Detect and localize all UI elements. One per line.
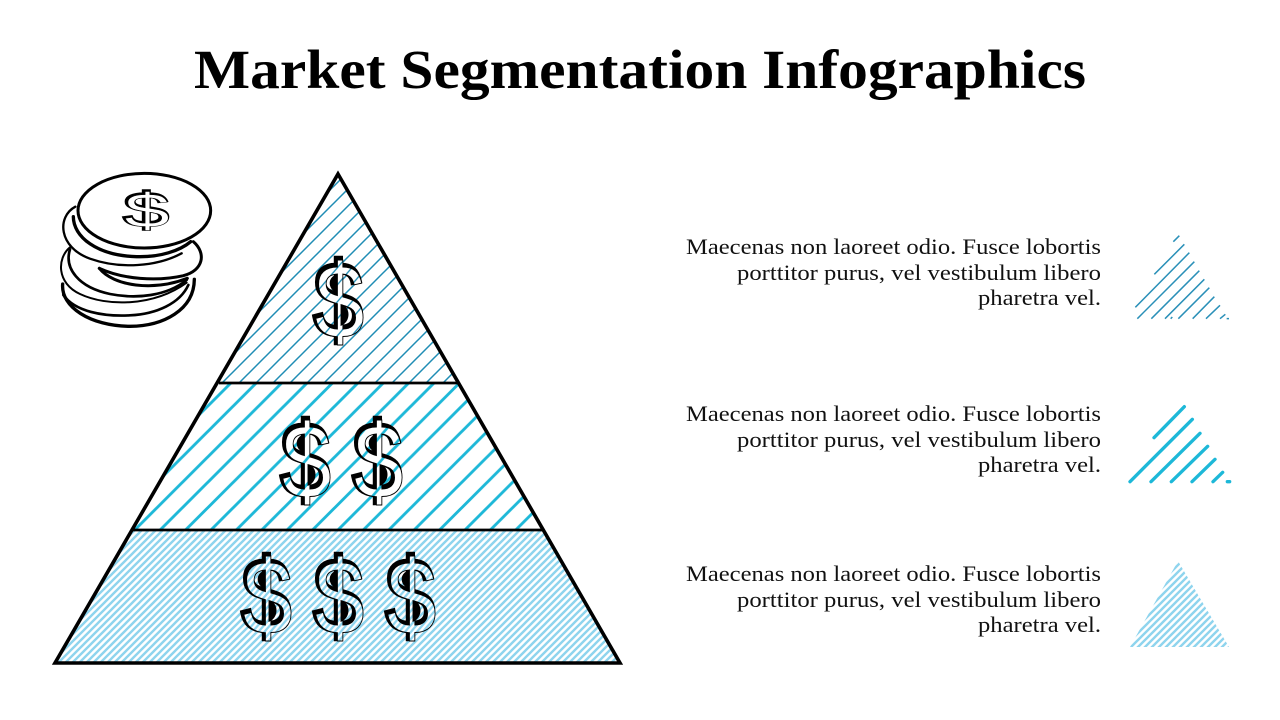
icon: legend triangle dark blue [1135, 236, 1229, 319]
icon: coin stack [61, 173, 211, 326]
tier: bottom hatch [55, 530, 620, 663]
icon: dollars middle tier: $ [354, 403, 404, 521]
text block 2: pharetra vel. [978, 452, 1101, 477]
text block 2 [686, 401, 1101, 477]
icon: dollars bottom tier: $ [241, 537, 291, 655]
icon: legend triangle light blue [1130, 562, 1229, 647]
text block 3 [686, 561, 1101, 637]
icon: dollars bottom tier: $ [313, 537, 363, 655]
text block 2: Maecenas non laoreet odio. Fusce lobortis [686, 401, 1101, 426]
icon: dollar top tier: $ [315, 243, 365, 361]
pyramid outline [55, 174, 620, 663]
icon: dollars middle tier: $ [280, 401, 330, 519]
text block 3: Maecenas non laoreet odio. Fusce lobortis [686, 561, 1101, 586]
text block 3: pharetra vel. [978, 612, 1101, 637]
tier: top hatch [219, 174, 458, 383]
icon: dollars middle tier [280, 401, 404, 521]
icon: legend triangle cyan [1130, 407, 1230, 482]
text block 1: porttitor purus, vel vestibulum libero [737, 260, 1101, 285]
icon: coin dollar: $ [123, 183, 169, 237]
pyramid chart [55, 174, 620, 663]
title: Market Segmentation Infographics [194, 39, 1086, 100]
icon: dollars bottom tier: $ [387, 539, 437, 657]
icon: dollar top tier: $ [313, 241, 363, 359]
icon: dollars bottom tier: $ [243, 539, 293, 657]
text block 1 [686, 234, 1101, 310]
text block 1: pharetra vel. [978, 285, 1101, 310]
icon: dollars middle tier: $ [352, 401, 402, 519]
icon: dollars bottom tier: $ [385, 537, 435, 655]
icon: coin dollar: $ [124, 184, 170, 238]
text block 2: porttitor purus, vel vestibulum libero [737, 427, 1101, 452]
icon: dollars bottom tier: $ [315, 539, 365, 657]
text block 3: porttitor purus, vel vestibulum libero [737, 587, 1101, 612]
icon: dollars bottom tier [241, 537, 437, 657]
icon: dollars middle tier: $ [282, 403, 332, 521]
tier: middle hatch [133, 383, 543, 530]
text block 1: Maecenas non laoreet odio. Fusce lobortis [686, 234, 1101, 259]
